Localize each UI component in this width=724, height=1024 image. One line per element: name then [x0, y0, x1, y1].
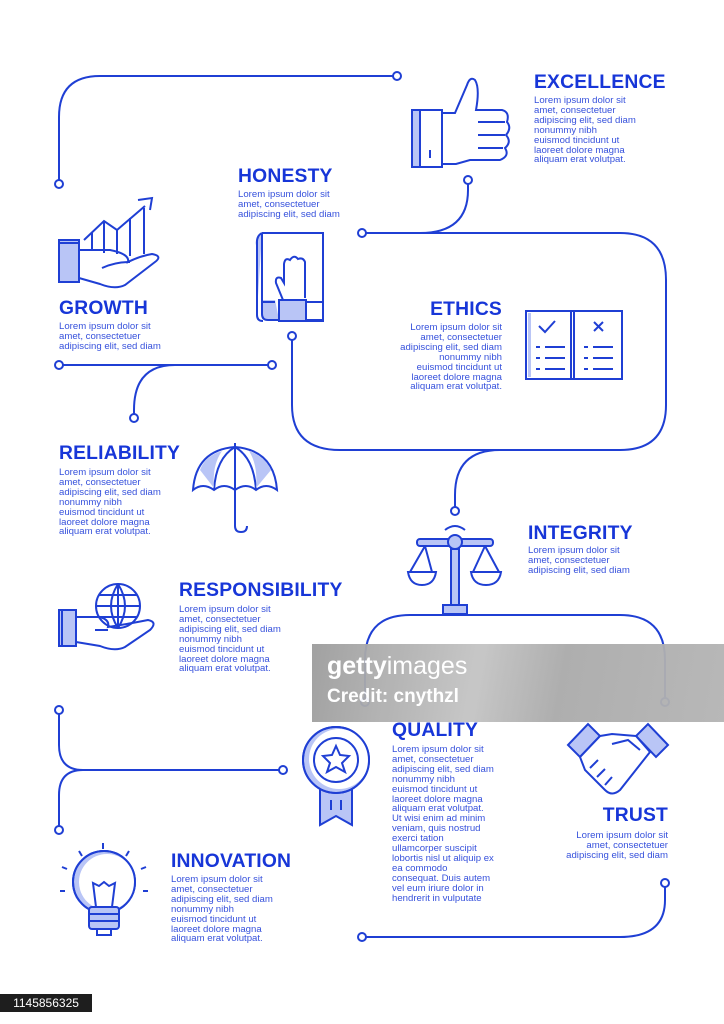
text: integrity	[528, 545, 630, 576]
text: excellence: adipiscing elit, sed diam	[534, 115, 636, 126]
text: quality: Lorem ipsum dolor sit	[392, 744, 484, 755]
text: quality: laoreet dolore magna	[392, 794, 483, 805]
text: quality: Ut wisi enim ad minim	[392, 813, 485, 824]
text: reliability	[59, 467, 161, 537]
watermark	[312, 644, 724, 722]
watermark: gettyimages	[327, 652, 467, 680]
text: responsibility: Lorem ipsum dolor sit	[179, 604, 271, 615]
heading: quality: QUALITY	[392, 720, 478, 741]
text: excellence: aliquam erat volutpat.	[534, 154, 626, 165]
text: growth: amet, consectetuer	[59, 331, 141, 342]
text: reliability: nonummy nibh	[59, 497, 122, 508]
text: responsibility: adipiscing elit, sed diam	[179, 624, 281, 635]
text: growth: adipiscing elit, sed diam	[59, 341, 161, 352]
text: quality: adipiscing elit, sed diam	[392, 764, 494, 775]
text: innovation: Lorem ipsum dolor sit	[171, 874, 263, 885]
text: responsibility	[179, 604, 281, 674]
heading: trust: TRUST	[603, 805, 668, 826]
text: innovation	[171, 874, 273, 944]
text: responsibility: aliquam erat volutpat.	[179, 663, 271, 674]
text: quality: ea commodo	[392, 863, 447, 874]
text: reliability: aliquam erat volutpat.	[59, 526, 151, 537]
text: innovation: amet, consectetuer	[171, 884, 253, 895]
heading: growth: GROWTH	[59, 298, 148, 319]
text: ethics: euismod tincidunt ut	[417, 362, 502, 373]
text: quality: ullamcorper suscipit	[392, 843, 477, 854]
heading: ethics: ETHICS	[430, 299, 502, 320]
text: ethics: Lorem ipsum dolor sit	[410, 322, 502, 333]
text: integrity: amet, consectetuer	[528, 555, 610, 566]
text: quality: lobortis nisl ut aliquip ex	[392, 853, 494, 864]
text: quality: nonummy nibh	[392, 774, 455, 785]
text: innovation: euismod tincidunt ut	[171, 914, 256, 925]
text: responsibility: nonummy nibh	[179, 634, 242, 645]
text: ethics: nonummy nibh	[439, 352, 502, 363]
text: innovation: laoreet dolore magna	[171, 924, 262, 935]
text: trust: adipiscing elit, sed diam	[566, 850, 668, 861]
text: excellence: euismod tincidunt ut	[534, 135, 619, 146]
text: reliability: amet, consectetuer	[59, 477, 141, 488]
text: quality: aliquam erat volutpat.	[392, 803, 484, 814]
text: innovation: adipiscing elit, sed diam	[171, 894, 273, 905]
text: ethics: adipiscing elit, sed diam	[400, 342, 502, 353]
heading: excellence: EXCELLENCE	[534, 72, 666, 93]
text: trust: amet, consectetuer	[586, 840, 668, 851]
footer id: 1145856325	[13, 996, 79, 1010]
text: responsibility: amet, consectetuer	[179, 614, 261, 625]
footer id	[0, 994, 92, 1012]
text: trust	[566, 830, 668, 861]
text: excellence: amet, consectetuer	[534, 105, 616, 116]
text: honesty: adipiscing elit, sed diam	[238, 209, 340, 220]
text: growth: Lorem ipsum dolor sit	[59, 321, 151, 332]
text: quality: exerci tation	[392, 833, 444, 844]
text: excellence: Lorem ipsum dolor sit	[534, 95, 626, 106]
text: honesty: Lorem ipsum dolor sit	[238, 189, 330, 200]
heading: reliability: RELIABILITY	[59, 443, 180, 464]
text: excellence	[534, 95, 636, 165]
text: reliability: euismod tincidunt ut	[59, 507, 144, 518]
watermark: Credit: cnythzl	[327, 686, 459, 707]
text: honesty	[238, 189, 340, 220]
text: innovation: aliquam erat volutpat.	[171, 933, 263, 944]
text: ethics: laoreet dolore magna	[411, 372, 502, 383]
text: ethics: aliquam erat volutpat.	[410, 381, 502, 392]
text: quality: amet, consectetuer	[392, 754, 474, 765]
text: quality: consequat. Duis autem	[392, 873, 490, 884]
heading: honesty: HONESTY	[238, 166, 333, 187]
text: responsibility: laoreet dolore magna	[179, 654, 270, 665]
text: reliability: laoreet dolore magna	[59, 517, 150, 528]
text: ethics: amet, consectetuer	[420, 332, 502, 343]
text: quality: veniam, quis nostrud	[392, 823, 481, 834]
text: innovation: nonummy nibh	[171, 904, 234, 915]
text: quality	[392, 744, 494, 904]
text: excellence: nonummy nibh	[534, 125, 597, 136]
text: ethics	[400, 322, 502, 392]
text: excellence: laoreet dolore magna	[534, 145, 625, 156]
text: trust: Lorem ipsum dolor sit	[576, 830, 668, 841]
heading: innovation: INNOVATION	[171, 851, 291, 872]
text: growth	[59, 321, 161, 352]
text: quality: hendrerit in vulputate	[392, 893, 482, 904]
heading: integrity: INTEGRITY	[528, 523, 633, 544]
text: responsibility: euismod tincidunt ut	[179, 644, 264, 655]
text: reliability: Lorem ipsum dolor sit	[59, 467, 151, 478]
heading: responsibility: RESPONSIBILITY	[179, 580, 342, 601]
text: quality: euismod tincidunt ut	[392, 784, 477, 795]
text: reliability: adipiscing elit, sed diam	[59, 487, 161, 498]
text: quality: vel eum iriure dolor in	[392, 883, 484, 894]
text: integrity: Lorem ipsum dolor sit	[528, 545, 620, 556]
text: honesty: amet, consectetuer	[238, 199, 320, 210]
text: integrity: adipiscing elit, sed diam	[528, 565, 630, 576]
